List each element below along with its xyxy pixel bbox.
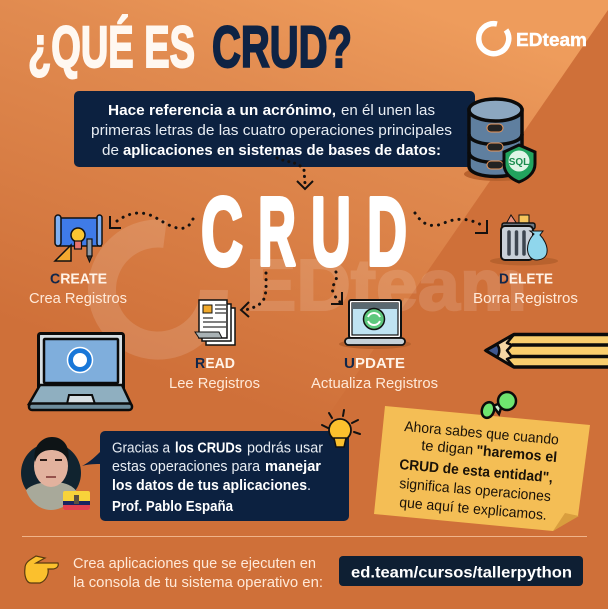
arrow: to create (110, 213, 193, 228)
quote text: los CRUDs (175, 440, 242, 456)
definition text (91, 102, 452, 159)
note text (399, 419, 559, 524)
watermark: EDteam logo: EDteam (246, 246, 527, 326)
link badge: ed.team/cursos/tallerpython (351, 564, 572, 582)
label: read (169, 355, 260, 392)
definition text: de (102, 142, 119, 159)
panel: definition (74, 91, 475, 167)
panel: teacher quote (21, 431, 349, 521)
call to action text (73, 556, 323, 591)
divider line (22, 536, 587, 537)
title: CRUD? (212, 15, 352, 80)
definition text: Hace referencia a un acrónimo, (108, 102, 336, 119)
icon: database with SQL shield: SQL (509, 157, 529, 168)
logo: EDteam (479, 24, 587, 54)
label: create (29, 270, 127, 307)
icon: green pushpin (480, 392, 516, 420)
icon: database with SQL shield (464, 99, 535, 182)
quote text: manejar (265, 459, 321, 475)
icon: pointing hand (25, 556, 58, 583)
icon: laptop with logo (29, 334, 132, 410)
quote text: los datos de tus aplicaciones (112, 478, 307, 494)
label: update: Actualiza Registros (311, 376, 438, 392)
watermark: EDteam logo (102, 234, 527, 346)
quote text: Gracias a (112, 440, 171, 456)
heading: CRUD (201, 177, 407, 286)
note text: Ahora sabes que cuando (404, 419, 559, 448)
panel: sticky note (374, 406, 590, 531)
icon: update laptop (339, 300, 411, 349)
arrow: to read (241, 273, 266, 317)
note text: significa las operaciones (399, 476, 551, 505)
label: delete (473, 270, 578, 307)
definition text: primeras letras de las cuatro operaciones principales (91, 122, 452, 139)
label: read: Lee Registros (169, 376, 260, 392)
call to action text: la consola de tu sistema operativo en: (73, 575, 323, 591)
heading: CRUD: R (258, 177, 296, 286)
heading: CRUD: D (367, 177, 407, 286)
heading: CRUD: U (311, 177, 351, 286)
label: read: READ (195, 355, 235, 372)
title: ¿QUÉ ES (28, 15, 195, 80)
arrow: definition to CRUD (277, 158, 313, 189)
icon: Ecuador flag (63, 491, 90, 510)
icon: read documents (195, 300, 235, 345)
icon: delete trash (490, 215, 558, 266)
icon: light bulb (322, 410, 360, 447)
label: create: CREATE (50, 270, 107, 288)
label: delete: DELETE (499, 270, 553, 288)
note text: "haremos el (476, 443, 558, 466)
icon: create blueprint (55, 215, 102, 262)
definition text: en él unen las (341, 102, 435, 119)
note text: CRUD de esta entidad", (399, 457, 553, 486)
label: update (311, 355, 438, 392)
link badge (339, 556, 583, 586)
avatar: teacher portrait (21, 437, 81, 510)
quote text: estas operaciones para (112, 459, 261, 475)
call to action text: Crea aplicaciones que se ejecuten en (73, 556, 316, 572)
label: update: UPDATE (344, 355, 405, 372)
arrow: to delete (415, 213, 487, 233)
label: create: Crea Registros (29, 291, 127, 307)
note text: que aquí te explicamos. (399, 495, 547, 524)
quote text: Prof. Pablo España (112, 499, 234, 515)
icon: pencil (486, 334, 608, 367)
arrow: to update (331, 272, 342, 304)
quote text: . (307, 478, 311, 494)
quote text: podrás usar (247, 440, 323, 456)
logo: EDteam: EDteam (516, 30, 587, 50)
label: delete: Borra Registros (473, 291, 578, 307)
note text: te digan (421, 438, 474, 459)
quote text (112, 440, 323, 515)
definition text: aplicaciones en sistemas de bases de datos: (123, 142, 441, 159)
heading: CRUD: C (201, 177, 243, 286)
